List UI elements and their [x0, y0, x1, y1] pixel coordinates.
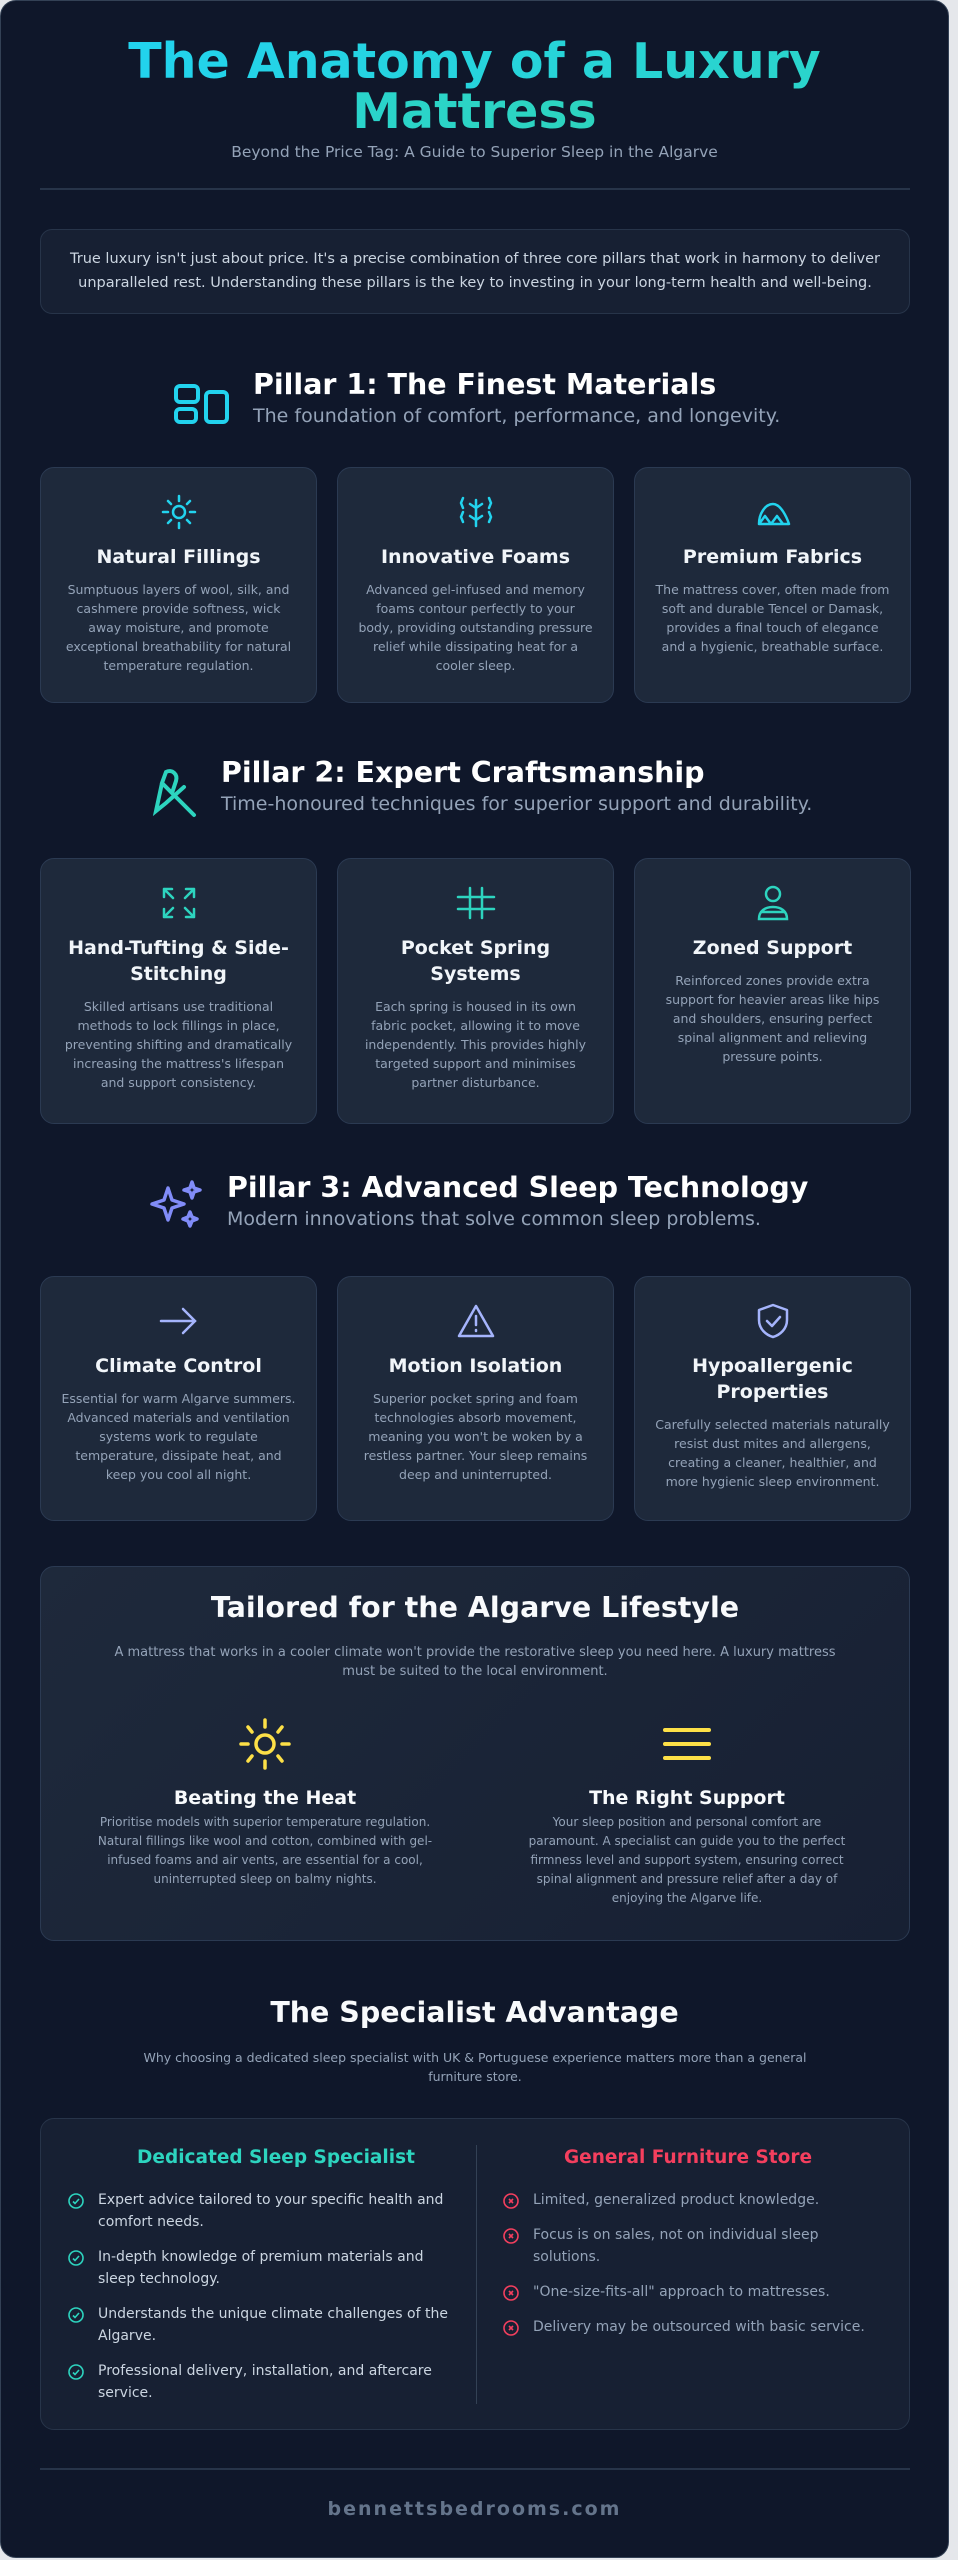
- algarve title: Tailored for the Algarve Lifestyle: [211, 1591, 739, 1624]
- column: dedicated specialist: Expert advice tailored to your specific health and comfort needs.: [98, 2192, 443, 2230]
- column: beating the heat: [98, 1718, 432, 1886]
- pillar 3 heading: Modern innovations that solve common sleep problems.: [227, 1208, 761, 1230]
- pillar 3 heading: [227, 1171, 808, 1230]
- card: pocket springs: Each spring is housed in its own fabric pocket, allowing it to move independently. This provides highly targeted support and minimises partner disturbance.: [365, 999, 586, 1090]
- footer: bennettsbedrooms.com: [328, 2498, 621, 2520]
- card: innovative foams: Advanced gel-infused and memory foams contour perfectly to your body, providing outstanding pressure relief while dissipating heat for a cooler sleep.: [358, 582, 593, 673]
- card: hypoallergenic: Carefully selected materials naturally resist dust mites and allergens, creating a cleaner, healthier, and more hygienic sleep environment.: [655, 1417, 890, 1489]
- panel: pillar 2 cards: [40, 858, 911, 1124]
- column: right support: The Right Support: [589, 1787, 785, 1809]
- card: premium fabrics: Premium Fabrics: [683, 546, 862, 568]
- column: right support: Your sleep position and personal comfort are paramount. A specialist can guide you to the perfect firmness level and support system, ensuring correct spinal alignment and pressure relief after a day of enjoying the Algarve life.: [529, 1815, 845, 1905]
- card: zoned support: Zoned Support: [693, 937, 852, 959]
- subtitle: Beyond the Price Tag: A Guide to Superior Sleep in the Algarve: [231, 143, 718, 161]
- card: premium fabrics: The mattress cover, often made from soft and durable Tencel or Damask, provides a final touch of elegance and a hygienic, breathable surface.: [656, 582, 889, 654]
- panel: comparison: [40, 2118, 910, 2430]
- column: dedicated specialist: Professional delivery, installation, and aftercare service.: [98, 2363, 432, 2401]
- card: climate control: Essential for warm Algarve summers. Advanced materials and ventilation systems work to regulate temperature, dissipate heat, and keep you cool all night.: [61, 1391, 296, 1482]
- column: dedicated specialist: Dedicated Sleep Specialist: [137, 2147, 415, 2168]
- panel: algarve lifestyle: [40, 1566, 910, 1941]
- column: beating the heat: Beating the Heat: [174, 1787, 356, 1809]
- card: hand-tufting: Skilled artisans use traditional methods to lock fillings in place, preventing shifting and dramatically increasing the mattress's lifespan and support consistency.: [65, 999, 292, 1090]
- column: general furniture store: Focus is on sales, not on individual sleep solutions.: [533, 2227, 818, 2265]
- intro box: True luxury isn't just about price. It's a precise combination of three core pillars that work in harmony to deliver unparalleled rest. Understanding these pillars is the key to investing in your long-term health and well-being.: [70, 251, 880, 291]
- algarve intro: A mattress that works in a cooler climate won't provide the restorative sleep you need here. A luxury mattress must be suited to the local environment.: [114, 1645, 836, 1679]
- icon: pillar 2 craftsmanship: [152, 769, 196, 818]
- column: dedicated specialist: In-depth knowledge of premium materials and sleep technology.: [98, 2249, 424, 2287]
- column: general furniture store: General Furniture Store: [564, 2147, 812, 2168]
- card: innovative foams: Innovative Foams: [381, 546, 570, 568]
- icon: yellow sun: [239, 1718, 291, 1770]
- card: climate control: Climate Control: [95, 1355, 262, 1377]
- card: hand-tufting: Hand-Tufting & Side-Stitching: [68, 937, 289, 985]
- card: pocket springs: Pocket Spring Systems: [401, 937, 550, 985]
- title: [128, 33, 821, 140]
- pillar 1 heading: Pillar 1: The Finest Materials: [253, 368, 716, 401]
- card: hand-tufting: [40, 858, 317, 1124]
- intro box: [40, 229, 910, 314]
- column: general furniture store: "One-size-fits-all" approach to mattresses.: [533, 2284, 830, 2300]
- icon: pillar 1 layout: [174, 384, 229, 424]
- panel: pillar 3 cards: [40, 1276, 911, 1521]
- column: general furniture store: Delivery may be outsourced with basic service.: [533, 2319, 865, 2335]
- card: zoned support: Reinforced zones provide extra support for heavier areas like hips and shoulders, ensuring perfect spinal alignment and relieving pressure points.: [666, 973, 879, 1064]
- specialist title: The Specialist Advantage: [270, 1996, 679, 2029]
- card: hypoallergenic: Hypoallergenic Properties: [692, 1355, 853, 1403]
- card: motion isolation: [337, 1276, 614, 1521]
- icon: pillar 3 sparkles: [150, 1180, 202, 1228]
- column: right support: [529, 1728, 846, 1905]
- title: Mattress: [352, 83, 597, 140]
- panel: pillar 1 cards: [40, 467, 911, 703]
- specialist subtitle: Why choosing a dedicated sleep specialist with UK & Portuguese experience matters more than a general furniture store.: [143, 2050, 807, 2084]
- pillar 1 heading: The foundation of comfort, performance, and longevity.: [253, 405, 780, 427]
- column: dedicated specialist: [68, 2147, 448, 2401]
- card: climate control: [40, 1276, 317, 1521]
- pillar 2 heading: Time-honoured techniques for superior support and durability.: [221, 793, 812, 815]
- pillar 1 heading: [252, 368, 780, 427]
- column: general furniture store: [503, 2147, 865, 2336]
- card: natural fillings: [40, 467, 317, 703]
- card: innovative foams: [337, 467, 614, 703]
- pillar 3 heading: Pillar 3: Advanced Sleep Technology: [227, 1171, 808, 1204]
- card: pocket springs: [337, 858, 614, 1124]
- column: dedicated specialist: Understands the unique climate challenges of the Algarve.: [98, 2306, 448, 2344]
- card: natural fillings: Natural Fillings: [96, 546, 261, 568]
- card: natural fillings: Sumptuous layers of wool, silk, and cashmere provide softness, wick away moisture, and promote exceptional breathability for natural temperature regulation.: [66, 582, 291, 673]
- card: hypoallergenic: [634, 1276, 911, 1521]
- pillar 2 heading: Pillar 2: Expert Craftsmanship: [221, 756, 705, 789]
- card: motion isolation: Motion Isolation: [389, 1355, 562, 1377]
- pillar 2 heading: [220, 756, 812, 815]
- title: The Anatomy of a Luxury: [128, 33, 821, 90]
- column: general furniture store: Limited, generalized product knowledge.: [533, 2192, 819, 2208]
- card: zoned support: [634, 858, 911, 1124]
- icon: support lines: [663, 1728, 711, 1760]
- column: beating the heat: Prioritise models with superior temperature regulation. Natural fillings like wool and cotton, combined with gel-infused foams and air vents, are essential for a cool, uninterrupted sleep on balmy nights.: [98, 1815, 432, 1886]
- card: premium fabrics: [634, 467, 911, 703]
- card: motion isolation: Superior pocket spring and foam technologies absorb movement, meaning you won't be woken by a restless partner. Your sleep remains deep and uninterrupted.: [364, 1391, 587, 1482]
